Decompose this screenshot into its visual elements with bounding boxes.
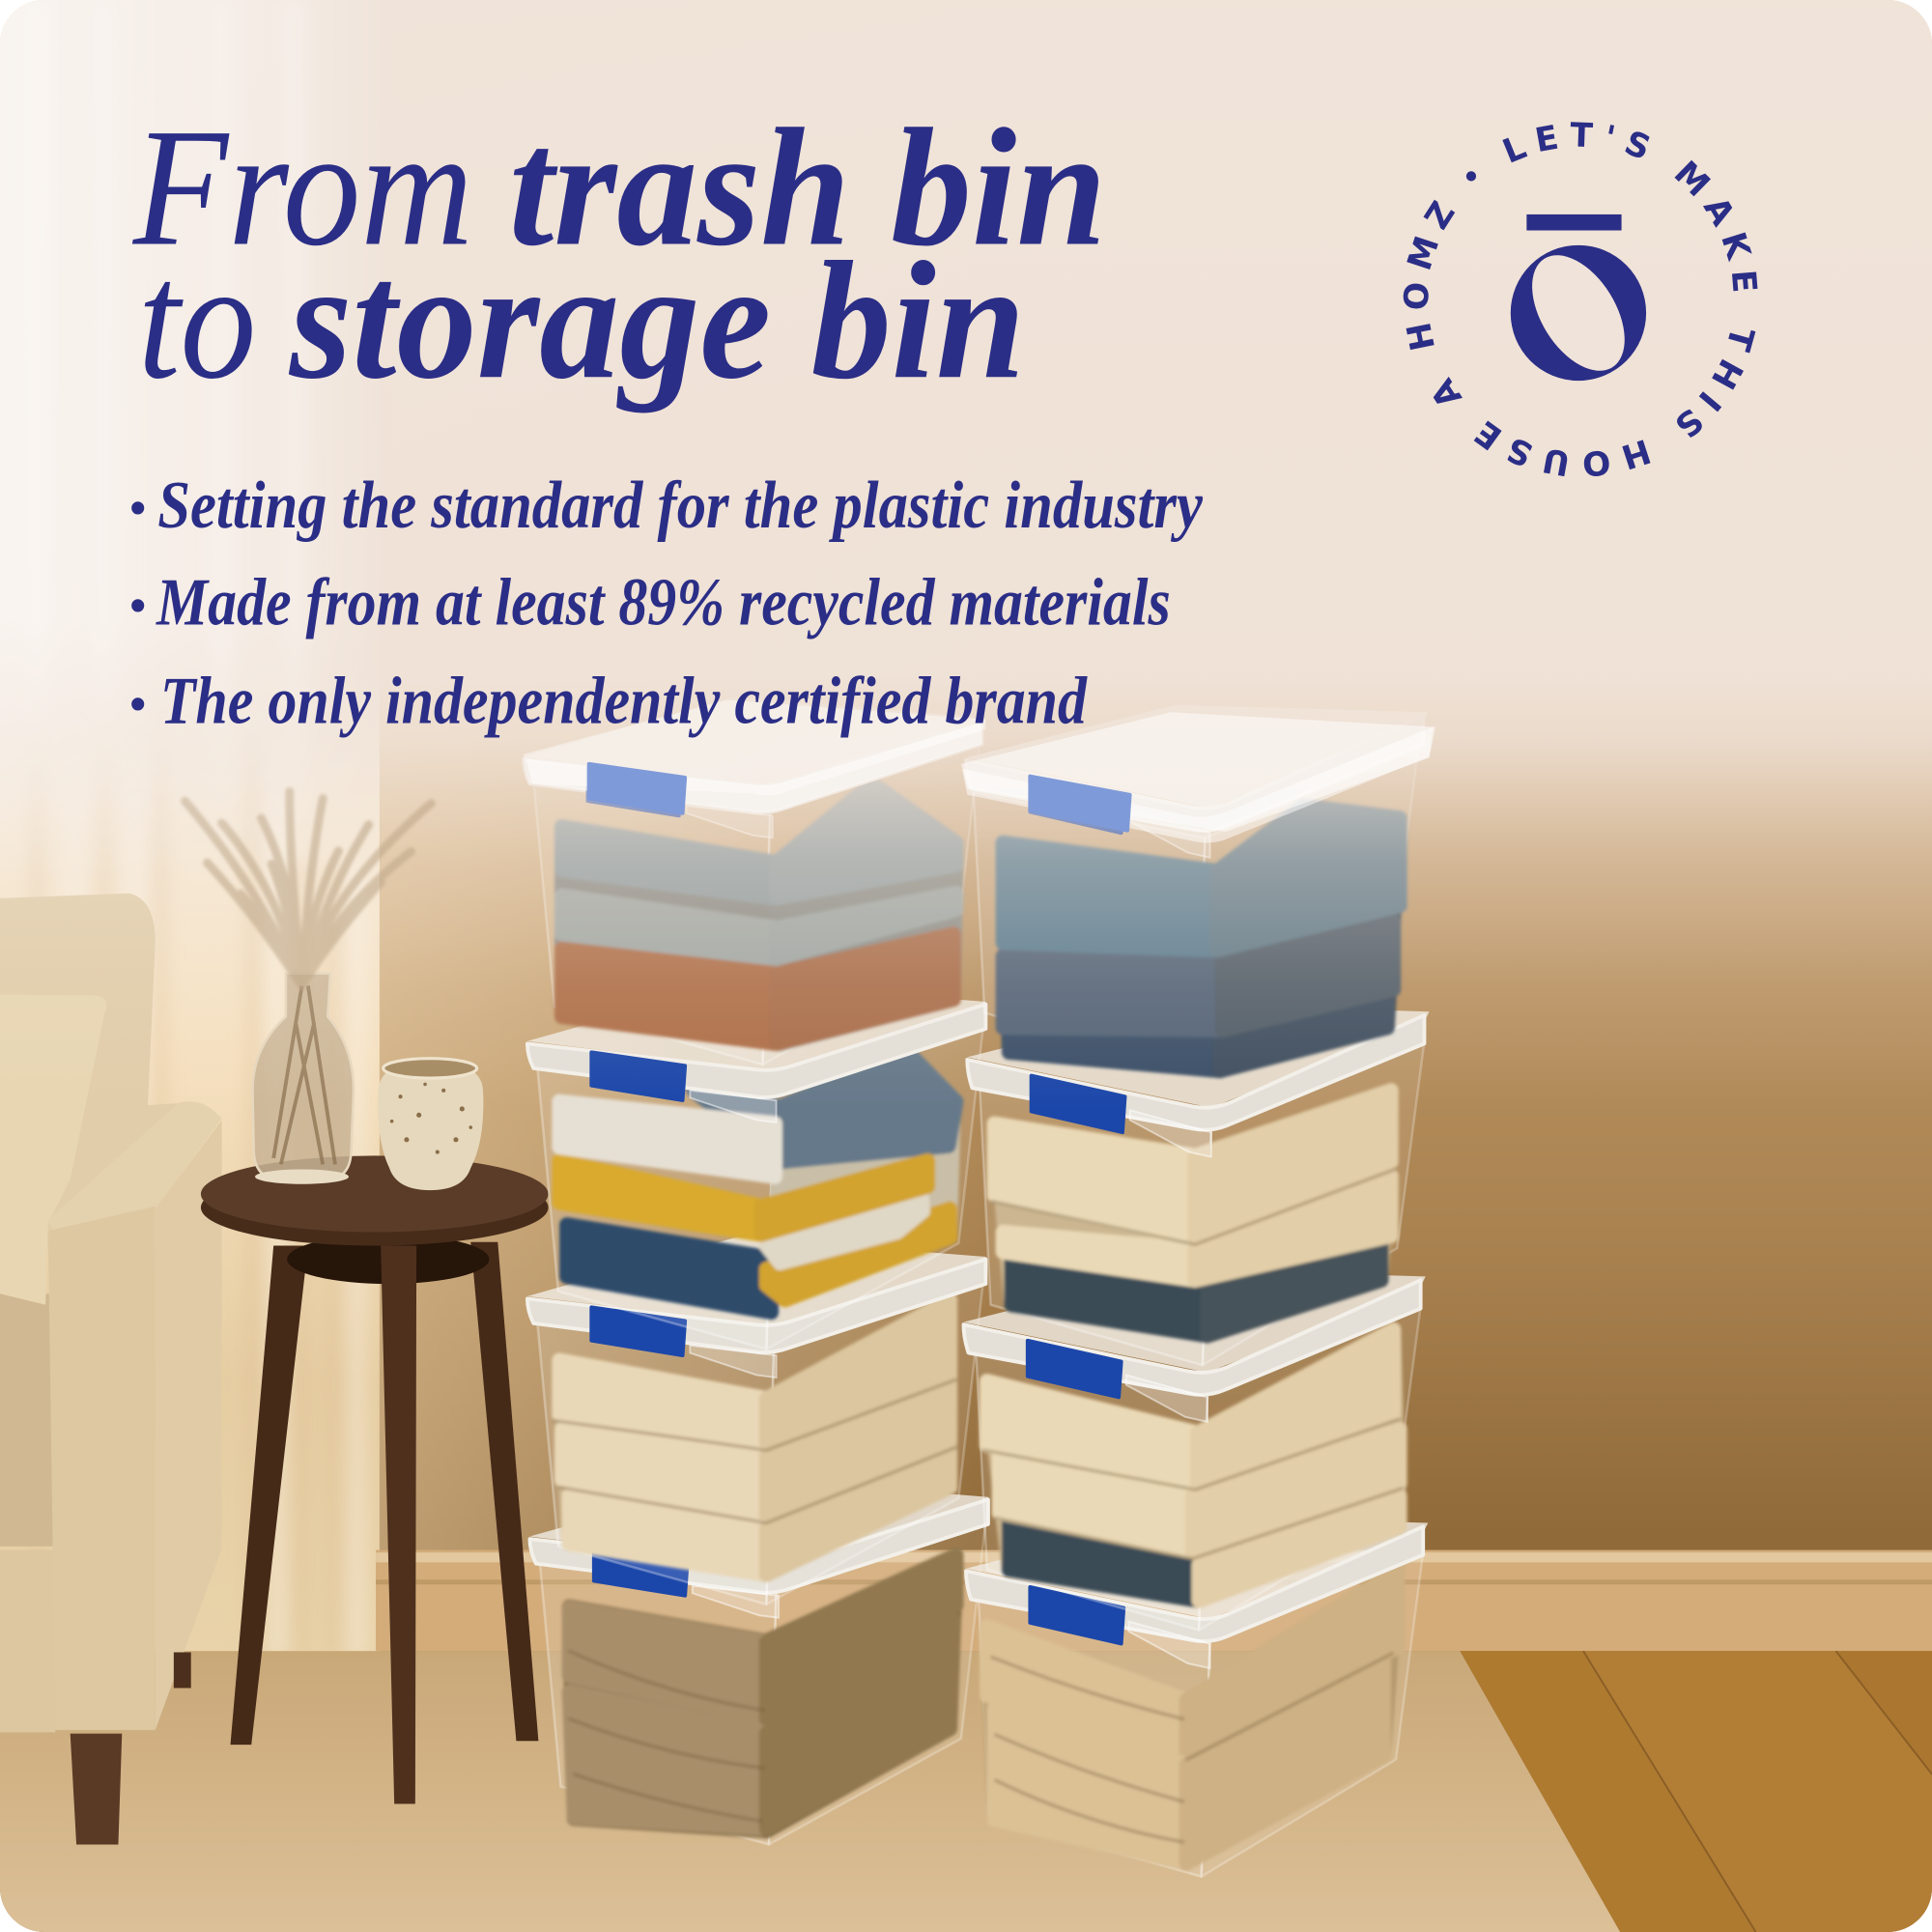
- bullet one: •: [129, 483, 146, 534]
- cream towels G: [984, 1329, 1403, 1601]
- curtain: [0, 705, 380, 1652]
- bullet three: The only independently certified brand: [160, 664, 1088, 739]
- baseboard: [376, 1550, 1932, 1651]
- carpet: [0, 1651, 1620, 1932]
- tan blankets H: [987, 1571, 1397, 1863]
- bin F: second right: [967, 1005, 1430, 1365]
- bin A: top left: [524, 697, 982, 1065]
- bin D: bottom left: [529, 1477, 988, 1844]
- title: trash bin: [509, 94, 1106, 281]
- folded clothes A: [562, 783, 956, 1043]
- bin G: third right: [963, 1269, 1426, 1631]
- logo mark: [1511, 214, 1646, 387]
- pampas grass plumes: [185, 791, 431, 985]
- top left lid highlight: [524, 699, 985, 813]
- circular slogan: LET'S MAKE THIS HOUSE A HOMZ: [1403, 122, 1758, 477]
- side table: [201, 1155, 549, 1804]
- brown blankets D: [569, 1555, 956, 1831]
- bin C: third left: [527, 1237, 985, 1605]
- glass vase: [252, 974, 354, 1184]
- bullet three: •: [129, 679, 146, 730]
- circular logo badge: [1403, 122, 1758, 477]
- wood floor: [1460, 1651, 1932, 1932]
- top right lid highlight: [961, 712, 1435, 842]
- bullet two: •: [129, 581, 146, 632]
- title: [132, 94, 1106, 413]
- cream towels C: [554, 1300, 955, 1575]
- speckled cup: [378, 1059, 483, 1190]
- bullet two: Made from at least 89% recycled materials: [156, 565, 1171, 640]
- curtain light through overlay: [0, 0, 313, 826]
- sweaters F: [992, 1091, 1395, 1336]
- sofa: [0, 894, 222, 1844]
- blue blankets E: [1003, 806, 1400, 1070]
- top fade overlay: [0, 0, 1932, 1072]
- bin E: top right: [966, 705, 1428, 1073]
- title: storage bin: [289, 226, 1025, 413]
- bin B: second left: [527, 982, 985, 1350]
- folded clothes B: [559, 1054, 956, 1312]
- title: to: [138, 226, 256, 413]
- bullet one: Setting the standard for the plastic industry: [157, 468, 1204, 543]
- title: From: [132, 94, 473, 281]
- bullet list: [129, 468, 1204, 739]
- bin H: bottom right: [966, 1516, 1428, 1877]
